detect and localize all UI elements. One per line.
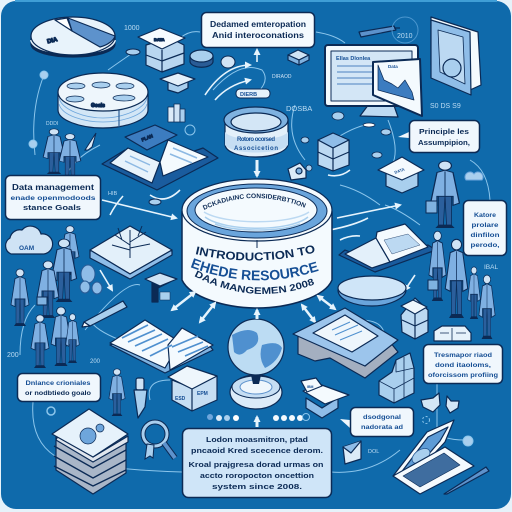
label 2010: 2010 <box>397 33 413 40</box>
envelope <box>343 441 361 464</box>
person right with briefcase <box>426 161 459 228</box>
large stacked disc <box>58 73 148 128</box>
callout: dnlance <box>18 374 100 402</box>
diamond box <box>378 157 424 193</box>
monitor: Ellas Dlonlea <box>336 56 371 62</box>
callout: data management: stance Goals <box>23 203 81 212</box>
small cube <box>288 50 309 65</box>
node <box>463 436 473 446</box>
main callout <box>182 428 332 498</box>
connector lines <box>20 32 490 472</box>
open note <box>434 326 471 341</box>
vial <box>134 378 147 418</box>
handwritten labels: DOSBA <box>286 104 312 113</box>
main title line 3: DAA MANGEMEN 2008 <box>194 270 314 294</box>
small cylinder <box>224 107 288 157</box>
double arrows <box>100 270 415 322</box>
cube network <box>318 133 349 171</box>
callout: principle <box>398 120 480 152</box>
callout: katoro <box>464 200 506 256</box>
diamond box: DATA <box>394 167 405 175</box>
callout: data management <box>6 176 100 220</box>
callout: katoro: perodo, <box>470 242 500 249</box>
orbit arrows and pills: DIRAOD <box>272 74 292 80</box>
handwritten labels: 200 <box>7 352 19 359</box>
open box left: ESD <box>175 396 186 402</box>
left people group <box>11 226 79 326</box>
callout: tresmapor: Tresmapor riaod <box>434 352 492 359</box>
diagonal sheet <box>125 125 177 150</box>
dashed small glyph <box>422 416 430 424</box>
book upright top right <box>431 17 481 95</box>
left lower people <box>31 307 79 368</box>
open box left: EPM <box>197 391 208 397</box>
lower right pen <box>444 467 489 494</box>
callout: dnlance: or nodbtiedo goalo <box>25 390 91 397</box>
pencil <box>82 301 127 327</box>
stacked boxes with cap <box>138 28 185 72</box>
small cylinder: Associcetion <box>234 146 278 152</box>
graduation cap <box>160 73 195 93</box>
camera icon <box>288 163 306 180</box>
callout: dsodgonal: dsodgonal <box>363 414 401 421</box>
cloud OAM <box>6 226 53 254</box>
callout: tresmapor: oforcissom profiing <box>428 372 498 379</box>
main title line 1: INTRODUCTION TO <box>196 246 314 261</box>
main callout: pncaoid Kred scecence derom. <box>191 446 323 455</box>
orbit arrows and pills <box>205 50 292 100</box>
callout: dsodgonal: nadorata ad <box>361 424 403 431</box>
callout: katoro: dinfilon <box>470 232 500 239</box>
tree tile <box>90 226 172 279</box>
large stacked disc: Goals <box>91 103 105 109</box>
handwritten labels <box>7 103 498 455</box>
inner ring title: DCKADIAINC CONSIDERBTTION <box>202 194 306 210</box>
small cylinder: Rotoro ocorsed <box>237 137 275 143</box>
pie stack <box>31 17 115 57</box>
graduation cap lower <box>145 273 177 302</box>
small cloud <box>465 172 483 180</box>
callout: dedamed: Dedamed emteropation <box>210 20 306 29</box>
pie stack: DIA <box>47 37 59 45</box>
glass dish <box>338 276 406 306</box>
magnifier <box>143 422 175 459</box>
callout: data management: Data management <box>12 183 94 192</box>
main callout: Kroal prajgresa dorad urmas on <box>188 460 324 469</box>
monitor <box>325 45 422 117</box>
main callout: accto roropocton oncettion <box>200 471 314 480</box>
main callout: system since 2008. <box>212 482 302 491</box>
diagonal sheet: PLAN <box>141 133 154 142</box>
callout: principle: Assumpipion, <box>418 138 470 147</box>
handwritten labels: HIB <box>108 191 118 197</box>
top pen <box>359 26 400 37</box>
callout: dedamed <box>202 12 314 48</box>
oval token <box>126 49 140 55</box>
up arrows <box>256 310 258 427</box>
gear token <box>47 407 55 415</box>
hearts <box>421 393 459 413</box>
callout: dsodgonal <box>340 408 414 436</box>
open book top <box>102 140 218 190</box>
handwritten labels: S0 DS S9 <box>430 103 461 110</box>
cloud OAM: OAM <box>19 245 34 252</box>
callout: tresmapor <box>424 344 502 384</box>
small person <box>109 369 125 416</box>
handwritten labels: 200 <box>90 359 101 365</box>
coins <box>168 104 185 122</box>
handwritten labels: DOL <box>368 449 379 455</box>
open book lower left <box>110 320 213 373</box>
callout: principle: Principle les <box>419 127 469 136</box>
callout: katoro: Katore <box>474 212 496 219</box>
stacked boxes with cap: DATA <box>154 37 165 42</box>
stone blobs <box>80 265 102 294</box>
handwritten labels: IBAL <box>484 264 498 271</box>
book stack <box>52 409 128 494</box>
right people group <box>428 231 495 339</box>
central cylinder <box>181 178 333 309</box>
callout: dedamed: Anid interoconations <box>212 31 305 40</box>
flying ovals <box>301 112 391 171</box>
globe on dish <box>228 319 284 409</box>
big book right <box>293 308 398 378</box>
small disc <box>190 50 213 67</box>
handwritten labels: DDDI <box>46 121 58 127</box>
laptop <box>393 420 474 494</box>
dots left <box>207 414 239 421</box>
dots right <box>273 414 310 421</box>
marker circles <box>29 71 195 148</box>
block tower <box>379 353 414 403</box>
monitor: Data <box>388 64 398 69</box>
open box right: IBM <box>307 385 314 389</box>
stacked boxes right <box>401 298 428 339</box>
open box right <box>301 378 349 418</box>
open box left <box>168 366 217 411</box>
arrows left of centre <box>102 160 257 218</box>
callout: data management: enade openmodoods <box>10 195 96 202</box>
people top left <box>43 129 81 177</box>
orbit arrows and pills: DIERB <box>240 92 257 98</box>
main title line 2: EHEDE RESOURCE <box>190 258 319 280</box>
open book right <box>339 224 436 272</box>
main callout: Lodon moasmitron, ptad <box>206 435 308 444</box>
callout: katoro: prolare <box>472 222 499 229</box>
label 2010 <box>392 17 418 43</box>
label 1000: 1000 <box>124 25 140 32</box>
small pen icon <box>85 133 96 150</box>
callout: dnlance: Dnlance crioniales <box>26 380 91 387</box>
callout: tresmapor: dond itaoloms, <box>435 362 491 369</box>
motion arrows right of centre <box>328 170 400 240</box>
